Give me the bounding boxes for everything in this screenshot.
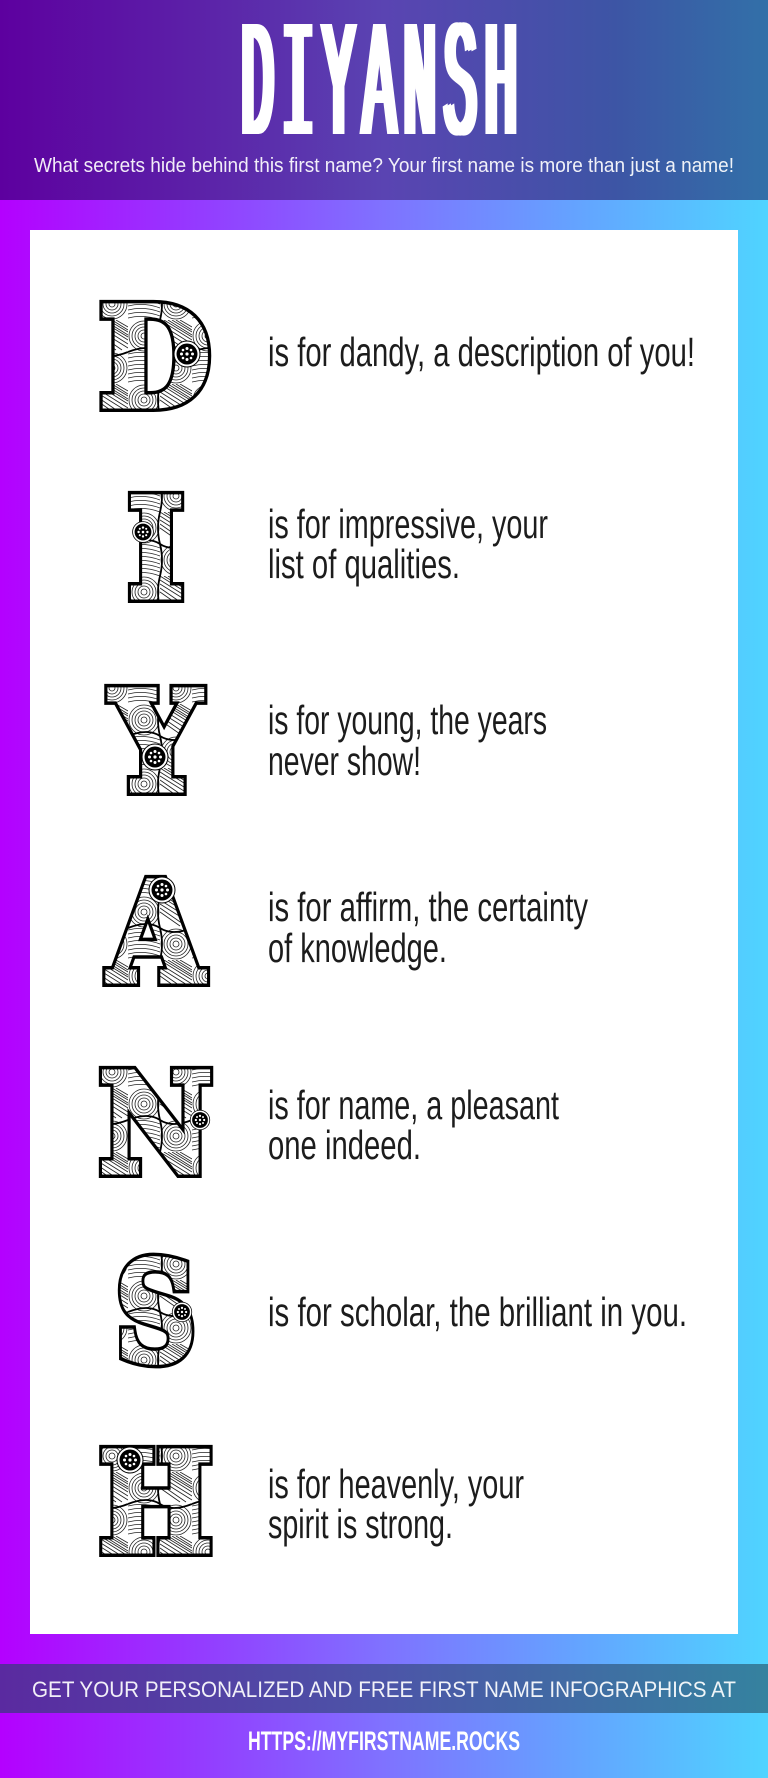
icon: flower S <box>172 1302 192 1322</box>
icon: flower I <box>133 522 153 542</box>
letter N: N <box>99 1044 212 1204</box>
row: letter N <box>99 1044 559 1204</box>
letter N: N <box>99 1044 212 1204</box>
text H <box>268 1461 524 1547</box>
text A <box>268 884 588 971</box>
text I: list of qualities. <box>268 541 460 587</box>
text N: one indeed. <box>268 1122 421 1168</box>
row: letter H <box>99 1424 524 1584</box>
panel: white card <box>30 230 738 1634</box>
text H: is for heavenly, your <box>268 1461 524 1507</box>
text A: of knowledge. <box>268 925 447 971</box>
row: letter S <box>116 1233 687 1393</box>
text Y <box>268 697 547 784</box>
icon: flower H <box>117 1447 143 1473</box>
icon: flower D <box>174 341 200 367</box>
footer url: HTTPS://MYFIRSTNAME.ROCKS <box>248 1726 520 1756</box>
text A: is for affirm, the certainty <box>268 884 588 930</box>
row: letter D <box>100 278 695 438</box>
title: DIYANSH <box>240 0 524 185</box>
row: letter Y <box>109 662 547 822</box>
letter A: A <box>107 854 205 1014</box>
letter H: H <box>99 1424 212 1584</box>
text Y: never show! <box>268 738 421 784</box>
icon: flower A <box>149 877 175 903</box>
letter I: I <box>128 470 184 630</box>
row: letter A <box>107 854 588 1014</box>
text H: spirit is strong. <box>268 1501 453 1547</box>
letter Y: Y <box>109 662 202 822</box>
icon: flower N <box>190 1110 210 1130</box>
letter Y: Y <box>109 662 202 822</box>
letter S: S <box>116 1233 196 1393</box>
letter I: I <box>128 470 184 630</box>
letter S: S <box>116 1233 196 1393</box>
footer band <box>0 1664 768 1713</box>
letter D: D <box>100 278 210 438</box>
icon: flower Y <box>142 744 168 770</box>
letter H: H <box>99 1424 212 1584</box>
row: letter I <box>128 470 548 630</box>
text Y: is for young, the years <box>268 697 547 743</box>
letter A: A <box>107 854 205 1014</box>
text I <box>268 501 548 587</box>
text N: is for name, a pleasant <box>268 1082 559 1128</box>
header band <box>0 0 768 200</box>
text N <box>268 1082 559 1168</box>
letter D: D <box>100 278 210 438</box>
subtitle: What secrets hide behind this first name? Your first name is more than just a name! <box>34 155 734 177</box>
text I: is for impressive, your <box>268 501 548 547</box>
